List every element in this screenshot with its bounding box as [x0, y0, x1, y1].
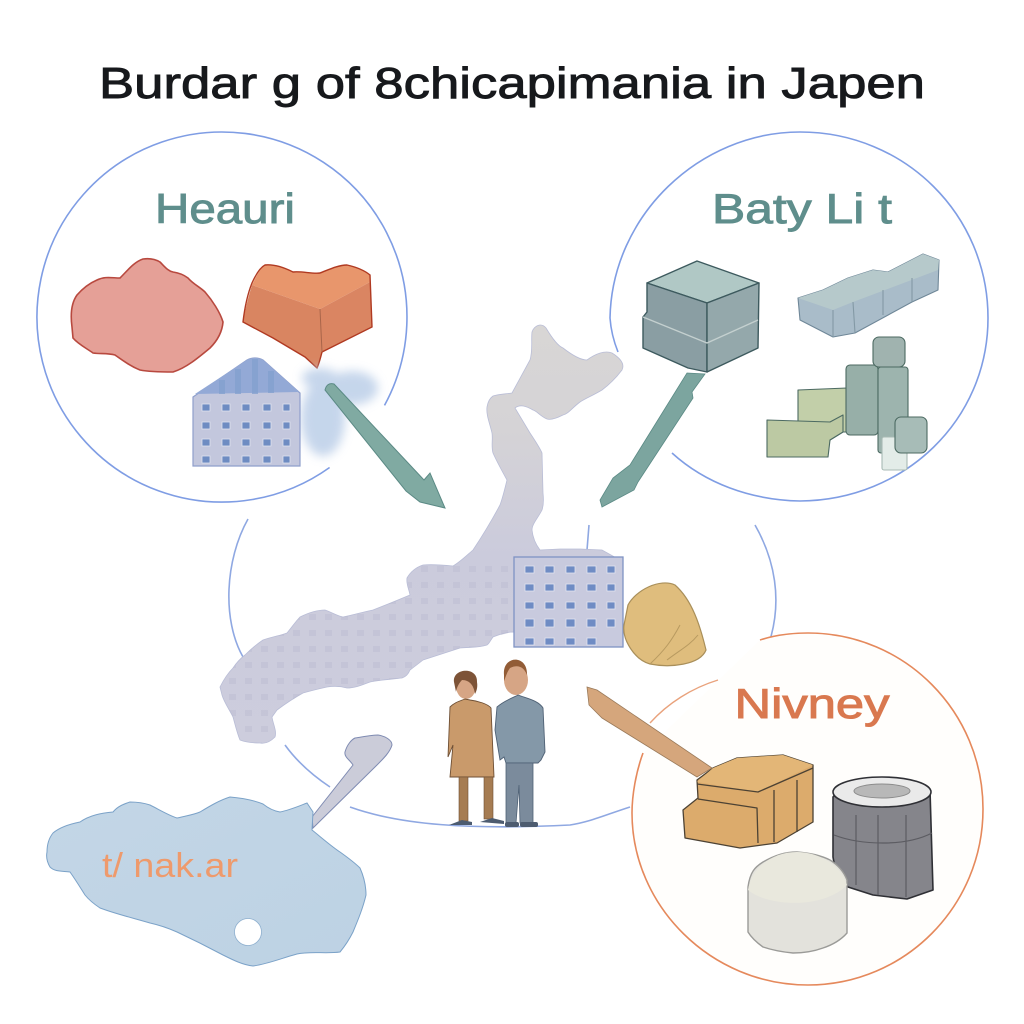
person: left	[448, 671, 504, 825]
icon: building on map	[514, 557, 623, 647]
person: right	[495, 660, 545, 827]
circle outline	[632, 633, 983, 985]
circle outline	[37, 132, 407, 502]
map of Japan	[220, 325, 623, 750]
island shape	[47, 797, 366, 966]
icon: tan rock	[624, 583, 706, 666]
icon: tan box	[683, 755, 813, 848]
title: Burdar g of 8chicapimania in Japen	[99, 59, 925, 108]
panel: Baty Lit	[610, 132, 988, 501]
icon: white cylinder	[748, 852, 847, 953]
callout pointer	[312, 735, 392, 828]
panel: Heauri	[37, 132, 407, 502]
icon: dark cylinder	[833, 777, 933, 899]
arrow: Nivney to map	[587, 687, 712, 777]
icon: green blocks and cylinders	[767, 337, 927, 470]
icon: building	[193, 358, 300, 466]
circle outline	[610, 132, 988, 501]
icon: pale blue bar	[798, 254, 939, 337]
heading: Baty Lit: Baty Li t	[712, 185, 892, 232]
icon: two people	[448, 660, 545, 827]
arrow: Heauri to map	[325, 384, 445, 508]
island hole	[234, 918, 262, 946]
heading: Heauri: Heauri	[155, 185, 295, 232]
central circle outline	[229, 519, 776, 827]
heading: Nivney: Nivney	[734, 680, 890, 727]
icon: red blob	[71, 259, 223, 372]
watercolor smudge	[301, 368, 378, 456]
panel: island callout	[47, 735, 392, 966]
panel: Nivney	[632, 633, 983, 985]
icon: orange box	[243, 265, 372, 368]
arrow: Baty Lit to map	[600, 373, 705, 507]
island label: t/ nak.ar	[102, 847, 238, 885]
icon: grey-green box	[643, 261, 759, 372]
